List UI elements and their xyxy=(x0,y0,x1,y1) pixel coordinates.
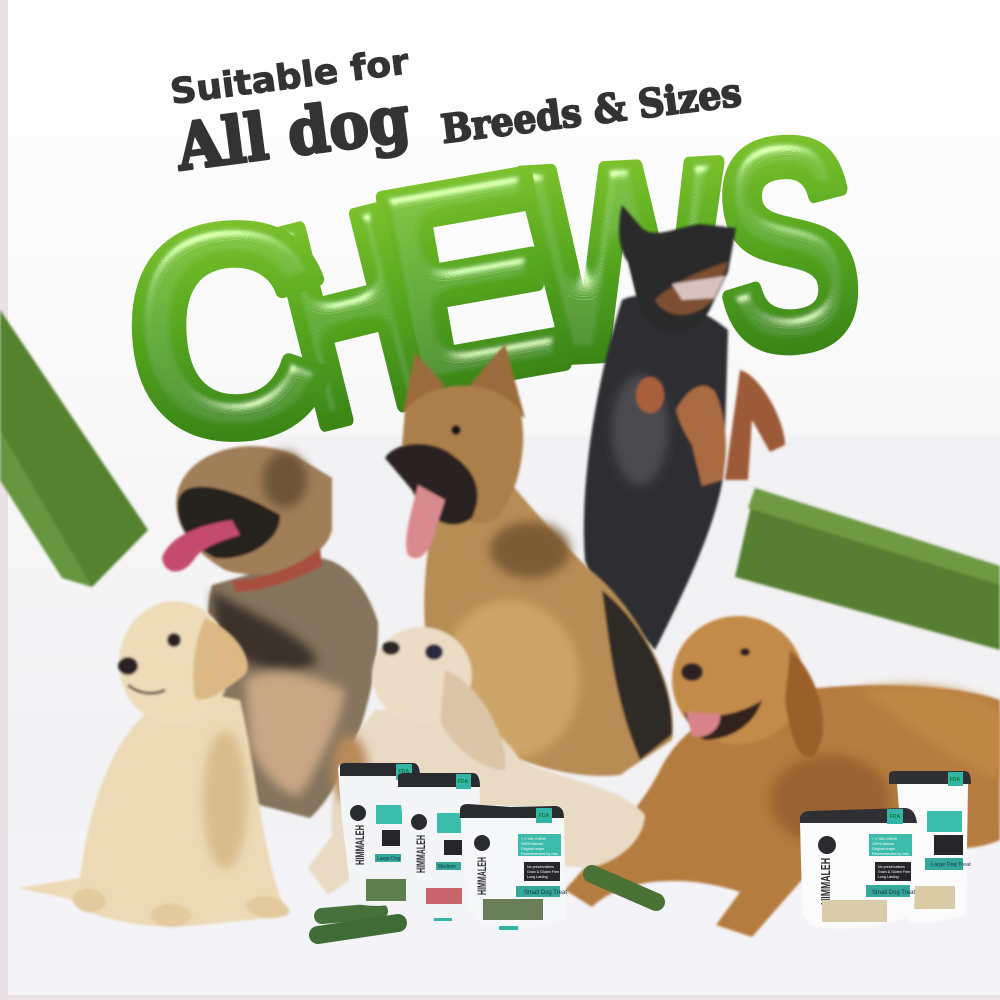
green chew stick left xyxy=(0,310,148,587)
retriever chest shadow xyxy=(770,755,890,845)
bottom green chews xyxy=(318,911,398,935)
window xyxy=(483,899,543,920)
puppy head xyxy=(119,601,231,725)
shepherd tongue xyxy=(406,485,445,558)
heading xyxy=(168,42,744,186)
balloon letter H: H xyxy=(249,146,453,487)
pouch header xyxy=(460,804,564,818)
doberman muzzle xyxy=(655,262,728,315)
retriever nose xyxy=(681,663,703,681)
pouch header xyxy=(889,771,971,784)
dark info box xyxy=(444,840,462,855)
left edge strip xyxy=(0,0,8,1000)
puppy nose xyxy=(118,657,138,675)
green balloon word CHEWS xyxy=(119,77,869,500)
logo xyxy=(818,836,836,854)
brand name: HIMMALEH xyxy=(818,858,833,905)
chew beside pouches xyxy=(592,874,656,902)
pouch: large natural xyxy=(889,771,971,923)
logo xyxy=(411,814,427,830)
mastiff belly xyxy=(245,671,345,795)
puppy eye xyxy=(167,633,181,647)
shepherd dark back xyxy=(602,590,672,760)
puppy mouth xyxy=(128,685,165,693)
feature box xyxy=(376,805,402,824)
retriever mouth xyxy=(684,700,762,740)
feature box: 100% Natural xyxy=(872,842,894,846)
pouch header xyxy=(340,763,420,776)
floor xyxy=(0,830,1000,1000)
wall panel xyxy=(270,436,1000,826)
shepherd muzzle xyxy=(385,444,478,525)
brand name: HIMMALEH xyxy=(475,857,489,895)
pouch: small green xyxy=(460,804,567,930)
feature box: + 1 YAK CHEW xyxy=(521,837,547,841)
feature box: Original recipe xyxy=(521,847,544,851)
window xyxy=(426,888,462,904)
retriever back fur xyxy=(860,686,1000,780)
dark info box xyxy=(875,862,911,881)
chew lower xyxy=(318,923,398,935)
feature box xyxy=(518,834,561,856)
feature box xyxy=(869,834,912,856)
spaniel leg shadow xyxy=(332,735,368,805)
dog: golden puppy xyxy=(18,601,290,927)
puppy paws xyxy=(72,889,290,927)
doberman front leg xyxy=(676,386,726,486)
feature box: 100% Natural xyxy=(521,842,543,846)
retriever ear xyxy=(785,650,823,757)
bottom edge strip xyxy=(0,995,1000,1000)
logo xyxy=(474,835,490,851)
dog: golden retriever xyxy=(565,616,1000,937)
dark info box xyxy=(524,862,560,881)
FDA badge xyxy=(396,764,412,780)
chew upper xyxy=(322,911,380,916)
logo xyxy=(350,805,366,821)
heading line: All dog: All dog xyxy=(171,81,414,186)
doberman chest patch xyxy=(636,377,664,413)
brand name: HIMMALEH xyxy=(414,835,428,873)
shepherd neck dark xyxy=(490,522,570,578)
bottom tab xyxy=(499,926,518,930)
size label: Small Dog Treat xyxy=(872,890,915,896)
FDA badge: FDA xyxy=(539,813,550,819)
dark info box: Grain & Gluten Free xyxy=(878,870,910,874)
pouch header xyxy=(398,773,480,787)
doberman head xyxy=(619,205,736,332)
bottom tab xyxy=(434,918,452,921)
window xyxy=(822,900,887,922)
balloon letter S: S xyxy=(707,77,869,412)
mastiff head xyxy=(176,446,332,574)
size label xyxy=(925,858,971,870)
spaniel head xyxy=(372,627,472,723)
mastiff face wrinkle xyxy=(263,452,307,508)
shepherd chest light xyxy=(440,600,580,760)
heading line: Breeds and Sizes: Breeds & Sizes xyxy=(438,69,744,153)
FDA badge: FDA xyxy=(399,769,410,775)
balloon letter C: C xyxy=(119,162,338,500)
brand name: HIMMALEH xyxy=(353,825,367,865)
dog: doberman xyxy=(584,205,785,650)
FDA badge: FDA xyxy=(890,814,901,820)
size label xyxy=(436,862,461,870)
window xyxy=(913,886,955,909)
dog: german shepherd xyxy=(385,344,673,776)
feature box: + 1 YAK CHEW xyxy=(872,837,898,841)
dark info box: No preservatives xyxy=(527,865,554,869)
feature box: Original recipe xyxy=(872,847,895,851)
spaniel nose xyxy=(382,641,400,655)
feature box xyxy=(927,811,962,832)
size label xyxy=(375,854,401,862)
dog: spaniel xyxy=(308,627,645,895)
feature box: Recommended by vets xyxy=(872,852,909,856)
pouch: large green xyxy=(338,763,420,906)
dark info box: No preservatives xyxy=(878,865,905,869)
heading line: Suitable for: Suitable for xyxy=(168,42,412,113)
dark info box xyxy=(934,835,963,855)
doberman raised leg xyxy=(725,370,785,480)
FDA badge: FDA xyxy=(950,777,961,783)
spaniel ear xyxy=(440,670,505,770)
puppy ear xyxy=(193,618,248,700)
FDA badge xyxy=(948,772,963,786)
dark info box: Grain & Gluten Free xyxy=(527,870,559,874)
mastiff dark chest xyxy=(212,590,318,671)
mastiff tongue xyxy=(162,520,240,572)
shepherd ears xyxy=(403,344,525,418)
retriever eye xyxy=(740,648,750,656)
mastiff muzzle xyxy=(178,487,280,558)
doberman sheen xyxy=(612,375,668,485)
FDA badge xyxy=(456,774,471,789)
mastiff collar xyxy=(232,548,322,592)
retriever head xyxy=(672,616,804,744)
pouch: small natural xyxy=(800,808,917,929)
pouch: medium pink xyxy=(398,773,480,921)
doberman mouth xyxy=(672,276,725,300)
balloon letter W: W xyxy=(518,103,733,418)
size label: Large Dog xyxy=(377,856,401,862)
green chew stick right xyxy=(735,488,1000,650)
size label: Medium xyxy=(438,864,456,870)
dark info box: Long Lasting xyxy=(527,875,548,879)
feature box: Recommended by vets xyxy=(521,852,558,856)
dark info box xyxy=(382,830,400,846)
size label: Large Dog Treat xyxy=(931,862,971,868)
balloon letter E: E xyxy=(354,109,586,453)
dog: mastiff xyxy=(162,446,378,818)
size label: Small Dog Treat xyxy=(524,890,567,896)
feature box xyxy=(437,813,461,833)
window xyxy=(366,879,406,901)
stick side face xyxy=(0,310,148,587)
shepherd head xyxy=(400,386,523,522)
puppy shading xyxy=(203,730,247,870)
stick top face xyxy=(748,488,1000,585)
shepherd eye xyxy=(451,425,461,435)
dark info box: Long Lasting xyxy=(878,875,899,879)
spaniel eye xyxy=(425,644,443,660)
pouch header xyxy=(800,808,917,823)
FDA badge: FDA xyxy=(458,779,469,785)
retriever tongue xyxy=(686,712,720,737)
